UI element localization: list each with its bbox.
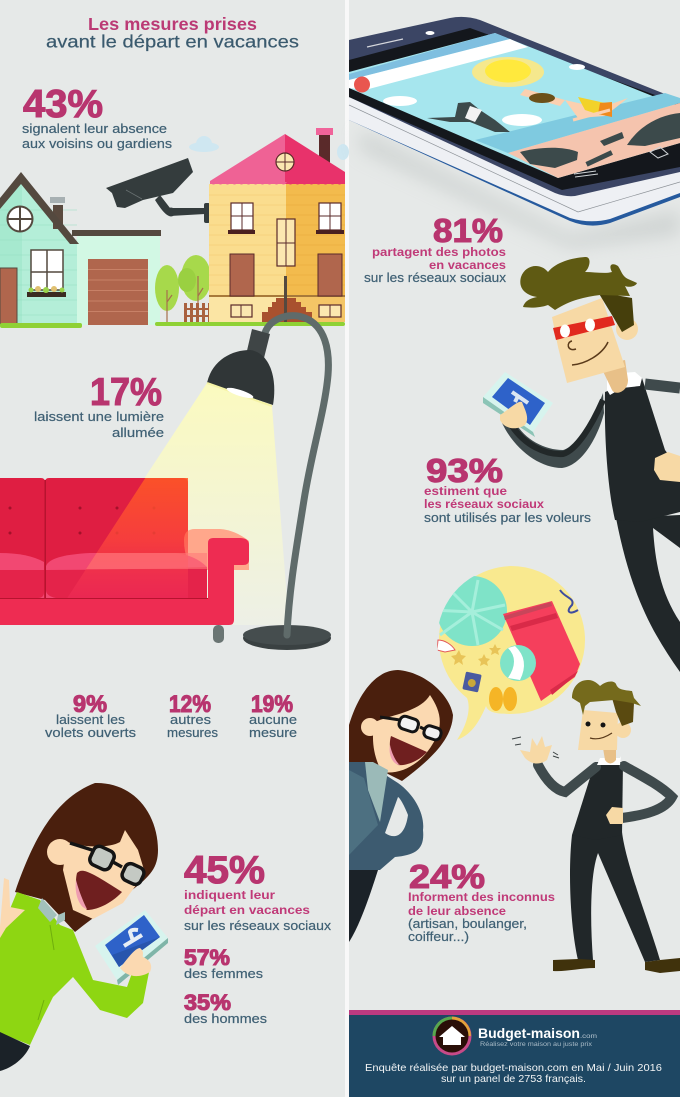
stat: 57%: 57% [184,945,230,970]
hair [15,783,158,932]
collar [38,898,65,925]
stat: 9% [45,691,136,740]
jacket [349,762,423,870]
stat: 12%: 12% [169,691,211,718]
brand name: Budget-maison [478,1026,580,1041]
neck and collar [597,748,621,765]
stat: 9%: 9% [73,691,107,718]
speech bubble: beach items [432,566,585,740]
stat: 24%: Informent des inconnus [408,890,555,904]
hands [520,736,552,764]
screen [349,33,680,178]
arms [538,765,596,792]
stat: 81%: 81% [433,212,503,249]
stat: 24%: 24% [409,858,485,895]
stat: 93% [424,452,591,525]
sea and sand [475,93,680,153]
illustration: houses and camera [0,128,349,328]
mask [553,316,615,340]
hair [349,670,453,781]
survey note: Enquête réalisée par budget-maison.com en Mai / Juin 2016 [365,1062,662,1074]
title: Les mesures prises [88,14,257,34]
neck and collar [600,360,642,395]
illustration: man waving [512,680,680,973]
raised hand [0,878,25,938]
stats row: other measures [45,691,297,740]
stat: 12% [167,691,218,740]
title [46,14,299,52]
stat: 45% [184,849,332,1026]
stat: 43%: 43% [23,83,103,126]
brand name: Réalisez votre maison au juste prix [480,1041,593,1048]
head [520,257,638,383]
nav icons [650,147,668,158]
trees and fence [155,255,226,322]
stat: 93%: 93% [426,452,503,489]
stat: 24%: (artisan, boulanger, [408,917,527,931]
stat: 17%: allumée [112,426,164,440]
logo [432,1016,472,1056]
stat: 9%: volets ouverts [45,726,136,740]
icon: security camera [106,158,210,223]
figures [427,89,628,132]
mouth [390,736,427,765]
stat: 81%: sur les réseaux sociaux [364,271,507,285]
clouds [383,64,585,126]
left arm [502,393,604,468]
sunglasses [560,590,578,612]
illustration: woman in blazer [349,670,453,942]
stat: 93%: les réseaux sociaux [424,497,544,511]
stat: 43%: aux voisins ou gardiens [22,137,172,151]
stat: 24%: de leur absence [408,904,506,918]
stat: 35% [184,990,267,1026]
glasses [380,715,442,741]
stat: 57% [184,945,263,981]
flip flops [489,687,517,711]
pants [349,870,378,942]
beach items [520,113,680,168]
title: avant le départ en vacances [46,32,299,52]
face [63,830,145,919]
umbrella [437,576,507,646]
shoes [553,958,680,973]
stat: 17%: 17% [90,371,162,414]
stat: 24% [408,858,555,944]
survey note: sur un panel de 2753 français. [441,1073,586,1085]
lapel [349,770,378,855]
ball [500,645,536,681]
mouth [76,871,122,910]
stat: 12%: mesures [167,726,218,740]
illustration: masked thief with phone [483,257,680,672]
stat: 45%: indiquent leur [184,888,275,902]
stat: 43%: signalent leur absence [22,122,167,136]
stat: 17% [34,371,164,440]
stat: 35%: 35% [184,990,231,1015]
illustration: woman in green with phone [0,783,168,1071]
stat: 81%: en vacances [429,258,506,272]
stat: 35%: des hommes [184,1012,267,1026]
survey note [365,1062,662,1085]
towel [503,601,580,701]
stat: 45%: 45% [184,849,265,892]
phone face [349,17,680,196]
passport [462,672,482,692]
phone shadow [360,130,680,248]
jacket [605,378,680,522]
pants [0,1032,30,1071]
stat: 24%: coiffeur...) [408,930,469,944]
phone [483,372,553,437]
icon: clouds [189,136,349,160]
green house [0,172,161,328]
head [572,680,641,750]
hair [520,257,637,310]
hand on hip [654,452,680,482]
stat: 9%: laissent les [56,713,125,727]
phone edges [349,100,680,226]
stat: 93%: estiment que [424,484,507,498]
stars [451,644,501,666]
brand name [478,1026,597,1048]
glasses [70,843,146,886]
stat: 19%: 19% [251,691,293,718]
shirt [365,762,388,822]
legs [616,515,680,672]
yellow house [155,128,345,326]
stat: 93%: sont utilisés par les voleurs [424,511,591,525]
light cone [48,383,289,625]
brand name: .com [580,1033,597,1040]
illustration: lamp and sofa [0,316,331,650]
stat: 45%: départ en vacances [184,903,310,917]
illustration: smartphone with beach photo [349,17,680,248]
legs [570,832,660,962]
stat: 19% [249,691,297,740]
stat: 45%: sur les réseaux sociaux [184,919,332,933]
sun [472,57,544,87]
face [373,695,440,773]
jacket [572,762,623,840]
stat: 19%: mesure [249,726,297,740]
motion lines [512,737,559,758]
stat: 17%: laissent une lumière [34,410,164,424]
stat: 57%: des femmes [184,967,263,981]
footer panel [349,1010,680,1097]
stat: 81% [364,212,507,285]
stat: 43% [22,83,172,151]
sofa [0,478,249,643]
body [0,892,150,1045]
lamp [207,316,331,650]
stat: 12%: autres [170,713,211,727]
right arm [645,384,680,388]
stat: 81%: partagent des photos [372,245,506,259]
stat: 19%: aucune [249,713,297,727]
phone [95,910,168,985]
